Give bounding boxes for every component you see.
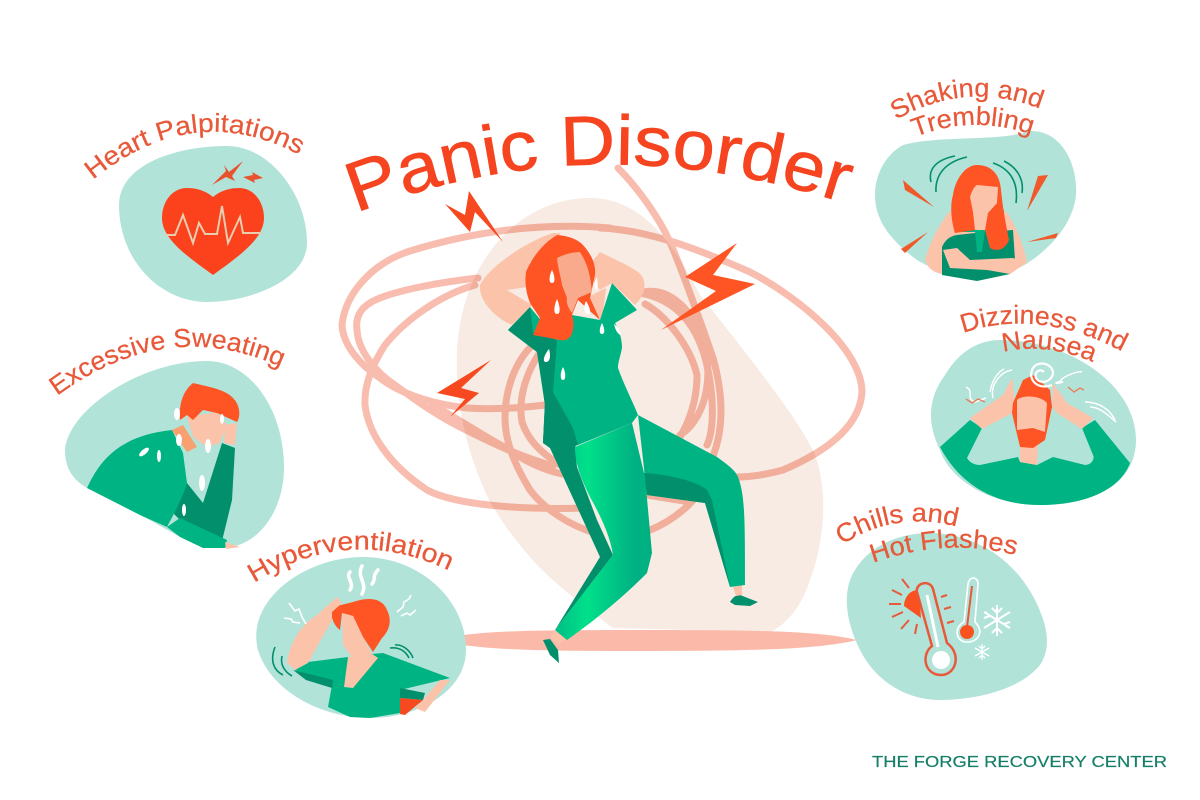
heartbeat line [165,206,262,243]
panel: chills and hot flashes [836,506,1047,700]
left arm [480,233,560,325]
background shape behind figure [457,198,823,632]
man with head in hand [87,383,240,549]
heading: Heart Palpitations [84,112,303,178]
panel: shaking and trembling [875,79,1076,281]
heading line 1: Shaking and [891,79,1045,118]
front leg dark side [543,400,613,630]
heading line 2: Hot Flashes [870,529,1017,562]
heading line 2: Nausea [1002,331,1095,362]
footer credit: THE FORGE RECOVERY CENTER [872,754,1167,771]
tangled scribble lines [342,168,862,532]
orange spikes [901,175,1058,253]
heading line 1: Chills and [836,506,959,542]
blob [65,361,284,548]
steam [349,566,378,594]
heading line 1: Dizziness and [960,304,1130,351]
motion arcs [990,369,1116,422]
face [557,252,592,313]
neck skin [590,288,606,320]
front foot [543,639,559,663]
blob [875,131,1076,278]
trembling woman [901,156,1058,281]
panel: excessive sweating [48,328,285,549]
dizzy man [940,364,1130,505]
heading: Hyperventilation [246,532,452,582]
person holding head [273,566,450,718]
title: Panic Disorder [345,113,854,211]
panel: heart palpitations [84,112,307,302]
motion arcs [273,645,413,676]
icon: cold thermometer [957,578,980,642]
icon: lightning bolt right [661,243,755,330]
blob [847,533,1047,700]
ground shadow [440,630,857,651]
icon: small bolts [212,161,263,185]
squiggles [966,372,1082,402]
shirt [508,283,638,450]
hair [525,235,600,340]
right arm [585,252,644,305]
sweat drops [544,270,621,380]
panel: hyperventilation [246,532,466,718]
blob [931,340,1136,505]
icon: snowflake small [975,644,989,660]
central figure: panicking woman [480,233,758,663]
blob [119,146,307,302]
heading: Excessive Sweating [48,328,285,395]
icon: lightning bolt left [437,360,491,417]
heading line 2: Trembling [910,106,1034,138]
icon: hot thermometer with sun [889,579,956,675]
panel: dizziness and nausea [930,304,1136,505]
icon: snowflake large [984,605,1010,636]
icon: lightning bolt top left [445,191,503,242]
back foot [730,595,758,606]
motion arcs [930,156,1022,203]
back leg [638,415,745,587]
spiral [1031,364,1053,387]
blob [256,557,466,718]
front leg [555,423,652,640]
shirt shadow [508,307,578,450]
squiggles [284,595,416,624]
icon: heart [162,188,264,275]
